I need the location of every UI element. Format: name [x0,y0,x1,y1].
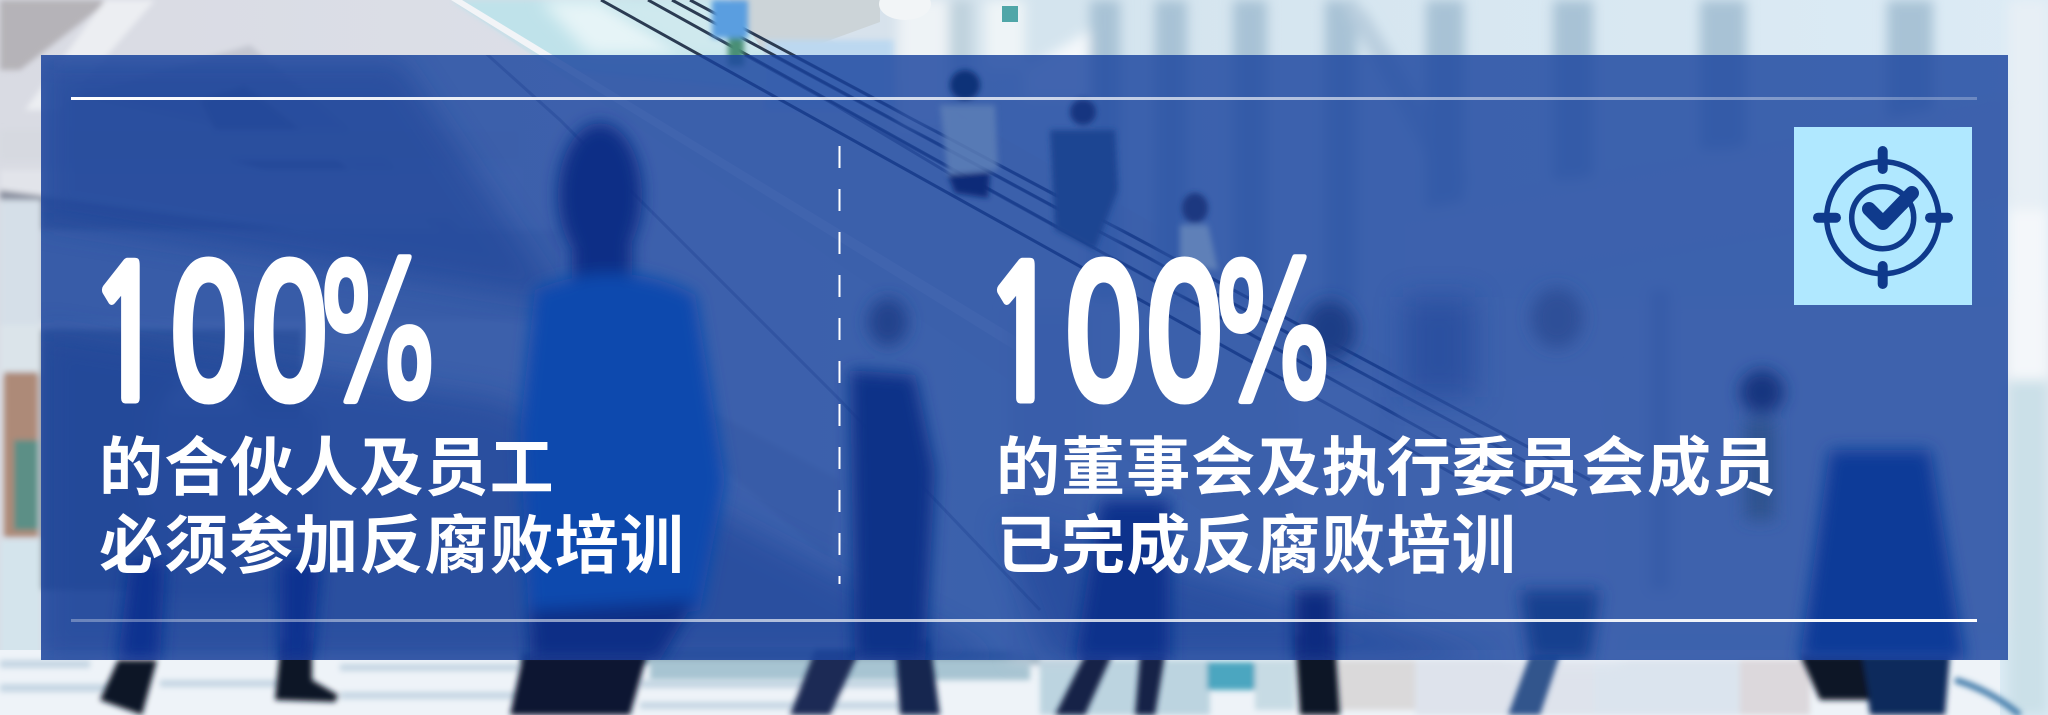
caption: board and executive committee [996,432,1777,582]
number: 100% right: 100 [982,245,1225,427]
number: 100% left [87,245,445,428]
statistic: partners and staff [87,245,685,582]
statistic: board and executive committee [982,245,1777,582]
caption: board and executive committee: 的董事会及执行委员会成员 [996,432,1777,504]
caption: partners and staff: 的合伙人及员工 [99,432,555,504]
number: 100% left: % [311,246,445,428]
floor [0,650,2000,715]
icon: target with check mark [1794,127,1972,305]
caption: partners and staff: 必须参加反腐败培训 [99,510,685,582]
building columns on right [898,0,2048,715]
figures seen through panel [41,55,1977,660]
soffit shading [41,60,1500,660]
number: 100% right [982,245,1340,428]
left stair soffit [0,0,840,660]
number: 100% left: 100 [87,245,330,427]
escalator [451,0,1590,660]
exit sign and lamp [879,0,1018,22]
dashed column divider [838,146,840,584]
caption: board and executive committee: 已完成反腐败培训 [996,510,1517,582]
number: 100% right: % [1206,246,1340,428]
caption: partners and staff [99,432,685,582]
